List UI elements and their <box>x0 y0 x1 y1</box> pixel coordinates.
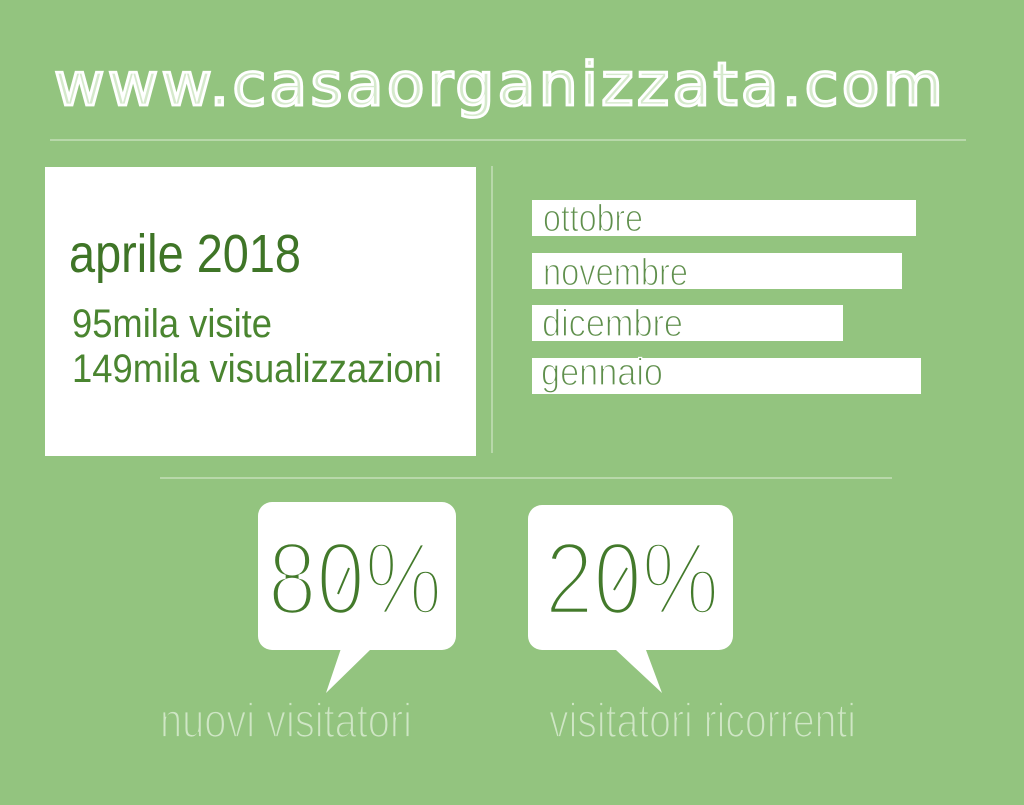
panel: monthly summary <box>45 167 476 456</box>
bar: gennaio <box>532 352 921 394</box>
text: visite e visualizzazioni <box>72 302 442 391</box>
bar: ottobre: ottobre <box>543 198 643 240</box>
bar chart: months <box>532 198 921 394</box>
bar: novembre: novembre <box>543 252 688 294</box>
label: visitatori ricorrenti: visitatori ricorrenti <box>549 695 856 748</box>
icon: speech bubble <box>258 502 456 693</box>
stat: 80%: 80% <box>268 521 442 636</box>
callout: 80% nuovi visitatori <box>160 502 456 748</box>
bar: gennaio: gennaio <box>541 352 663 394</box>
icon: speech bubble <box>528 505 733 693</box>
bar: ottobre <box>532 198 916 240</box>
text: visite e visualizzazioni: 149mila visualizzazioni <box>72 347 442 391</box>
bar: dicembre: dicembre <box>542 303 683 345</box>
title: www.casaorganizzata.com <box>54 50 946 120</box>
bar: novembre <box>532 252 902 294</box>
stat: 20%: 20% <box>545 521 719 636</box>
label: nuovi visitatori: nuovi visitatori <box>160 695 412 748</box>
bar: dicembre <box>532 303 843 345</box>
text: visite e visualizzazioni: 95mila visite <box>72 302 272 346</box>
callout: 20% visitatori ricorrenti <box>528 505 856 748</box>
heading: aprile 2018: aprile 2018 <box>69 224 301 284</box>
